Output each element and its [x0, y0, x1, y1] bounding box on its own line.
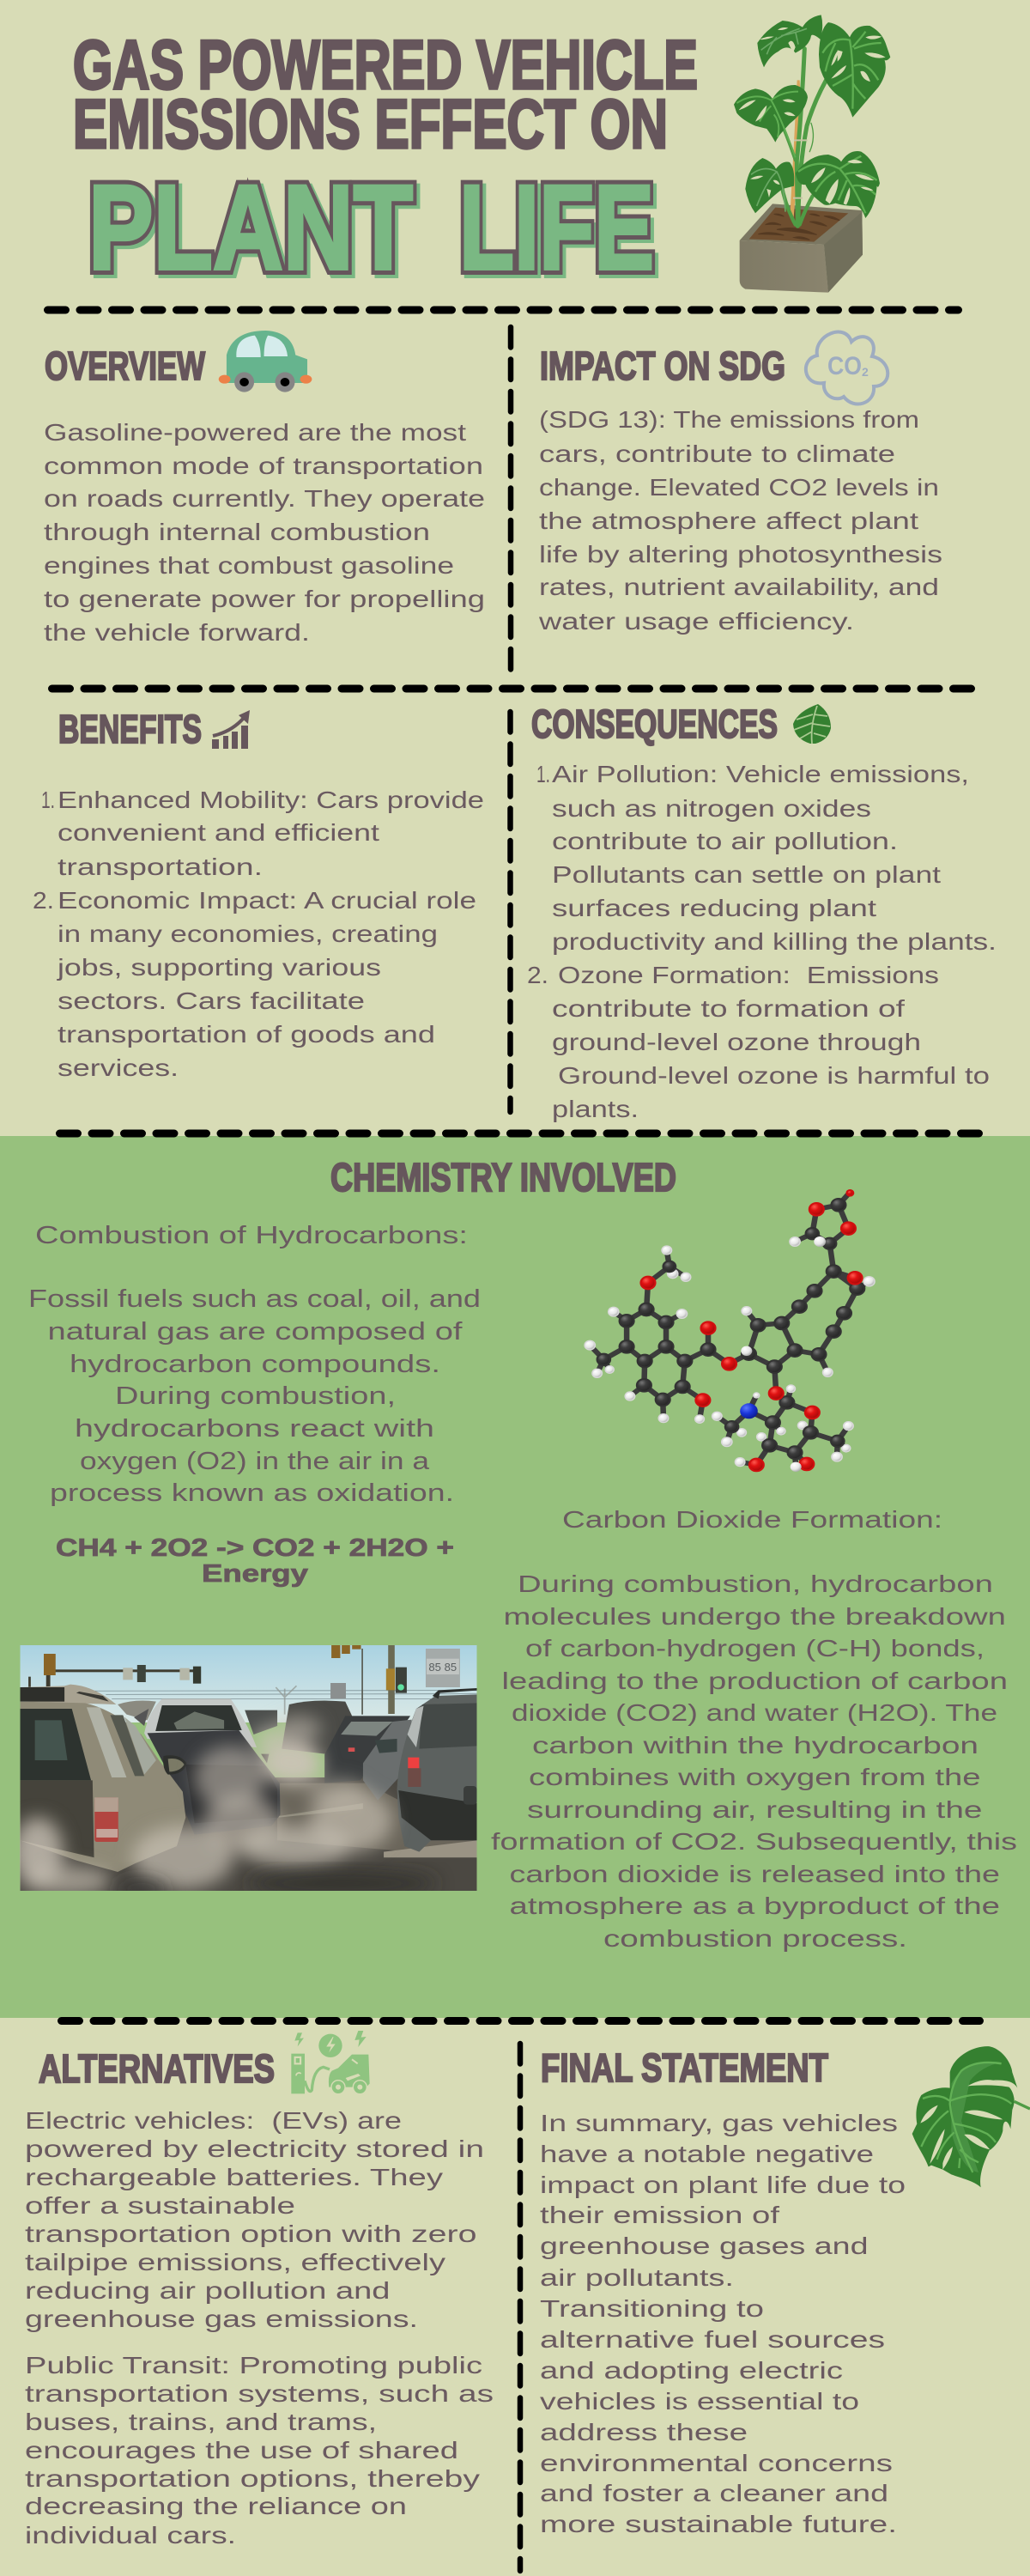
benefits list: services.: [58, 1054, 179, 1081]
text: carbon dioxide formation: leading to the production of carbon: [501, 1668, 1008, 1694]
consequences list: productivity and killing the plants.: [552, 928, 997, 955]
molecule model: [585, 1190, 875, 1472]
impact body text: (SDG 13): The emissions from: [539, 406, 919, 433]
overview body text: through internal combustion: [44, 519, 430, 545]
alternatives body: electric vehicles: tailpipe emissions, effectively: [25, 2249, 445, 2275]
title highlight: plant life: [88, 160, 657, 298]
benefits list: Economic Impact: A crucial role: [58, 887, 476, 914]
impact body text: the atmosphere affect plant: [539, 507, 918, 534]
benefits list: 1.: [41, 787, 55, 813]
text: combustion of hydrocarbons: Combustion of Hydrocarbons:: [35, 1222, 468, 1249]
impact body text: [538, 406, 942, 635]
icon: growth chart with arrow: [212, 710, 250, 749]
plant pot: [740, 204, 863, 293]
benefits list: 2.: [33, 887, 54, 914]
icon: CO2 cloud: CO: [827, 352, 862, 380]
overview body text: common mode of transportation: [44, 453, 483, 479]
benefits list: [33, 787, 484, 1081]
alternatives body: electric vehicles: Electric vehicles: (EVs) are: [25, 2107, 402, 2134]
heading: impact on SDG: IMPACT ON SDG: [540, 343, 785, 388]
text: carbon dioxide formation: Carbon Dioxide Formation:: [562, 1506, 942, 1533]
heading: overview: OVERVIEW: [45, 343, 205, 388]
alternatives body: electric vehicles: transportation option with zero: [25, 2221, 477, 2247]
final statement body text: address these: [540, 2419, 748, 2445]
title highlight: plant life: LIFE: [463, 163, 657, 298]
exhaust smoke: [13, 1716, 437, 1899]
benefits list: transportation.: [58, 854, 263, 880]
panel: overview: [44, 331, 485, 646]
overview body text: Gasoline-powered are the most: [44, 419, 466, 446]
leaf top right: [819, 22, 890, 118]
text: combustion of hydrocarbons: process known as oxidation.: [50, 1479, 454, 1507]
final statement body text: their emission of: [540, 2202, 779, 2228]
impact body text: cars, contribute to climate: [539, 440, 895, 467]
final statement body text: environmental concerns: [540, 2450, 893, 2476]
consequences list: Ozone Formation: Emissions: [558, 962, 939, 988]
alternatives body: electric vehicles: greenhouse gas emissions.: [25, 2306, 418, 2332]
final statement body text: impact on plant life due to: [540, 2172, 906, 2198]
left wagon: [20, 1685, 186, 1872]
text: carbon dioxide formation: atmosphere as a byproduct of the: [510, 1893, 1000, 1919]
text: carbon dioxide formation: During combustion, hydrocarbon: [518, 1571, 993, 1597]
overview body text: to generate power for propelling: [44, 586, 485, 612]
overview body text: engines that combust gasoline: [44, 552, 454, 579]
heading: benefits: BENEFITS: [58, 707, 202, 751]
consequences list: ground-level ozone through: [552, 1029, 921, 1055]
alternatives body: public transit: decreasing the reliance on: [25, 2493, 407, 2519]
impact body text: change. Elevated CO2 levels in: [539, 474, 939, 501]
alternatives body: public transit: Public Transit: Promoting public: [25, 2352, 482, 2379]
text: combustion of hydrocarbons: oxygen (O2) in the air in a: [80, 1448, 430, 1475]
panel: final statement: [540, 2045, 1030, 2537]
text: carbon dioxide formation: molecules undergo the breakdown: [503, 1603, 1006, 1630]
panel: alternatives: [25, 2031, 494, 2549]
text: carbon dioxide formation: of carbon-hydrogen (C-H) bonds,: [525, 1635, 985, 1662]
text: combustion of hydrocarbons: natural gas are composed of: [48, 1318, 464, 1346]
alternatives body: public transit: individual cars.: [25, 2522, 236, 2549]
benefits list: jobs, supporting various: [57, 954, 381, 981]
icon: large monstera leaf: [912, 2046, 1030, 2187]
alternatives body: electric vehicles: rechargeable batteries. They: [25, 2164, 443, 2190]
overview body text: [44, 419, 485, 646]
final statement body text: greenhouse gases and: [540, 2233, 869, 2259]
alternatives body: electric vehicles: [25, 2107, 484, 2332]
text: carbon dioxide formation: formation of CO2. Subsequently, this: [491, 1828, 1017, 1855]
text: combustion of hydrocarbons: [28, 1222, 481, 1507]
equation: Energy: [202, 1560, 308, 1588]
text: carbon dioxide formation: combustion process.: [603, 1925, 907, 1952]
icon: CO2 cloud: 2: [862, 365, 869, 379]
final statement body text: and foster a cleaner and: [540, 2480, 888, 2506]
overview body text: the vehicle forward.: [44, 619, 310, 646]
text: combustion of hydrocarbons: Fossil fuels such as coal, oil, and: [28, 1285, 481, 1313]
final statement body text: air pollutants.: [540, 2264, 734, 2291]
panel: benefits: [33, 707, 484, 1081]
centre suv and sedan: [144, 1698, 281, 1835]
text: combustion of hydrocarbons: hydrocarbon compounds.: [70, 1351, 440, 1378]
consequences list: such as nitrogen oxides: [552, 795, 871, 822]
title highlight: plant life: LIFE: [459, 160, 654, 295]
consequences list: plants.: [552, 1096, 639, 1122]
icon: potted monstera plant: [734, 15, 890, 293]
equation: [56, 1534, 454, 1588]
right suv: [375, 1688, 477, 1852]
alternatives body: public transit: encourages the use of shared: [25, 2437, 458, 2464]
final statement body text: alternative fuel sources: [540, 2326, 885, 2353]
chemistry green band background: [0, 1136, 1030, 2018]
impact body text: life by altering photosynthesis: [539, 541, 942, 568]
equation: CH4 + 2O2 -> CO2 + 2H2O +: [56, 1534, 454, 1562]
panel: consequences: [527, 702, 997, 1122]
alternatives body: public transit: transportation options, thereby: [25, 2465, 480, 2492]
text: carbon dioxide formation: dioxide (CO2) and water (H2O). The: [512, 1699, 997, 1726]
final statement body text: [540, 2110, 906, 2537]
consequences list: surfaces reducing plant: [552, 895, 876, 921]
consequences list: Pollutants can settle on plant: [552, 861, 941, 888]
final statement body text: vehicles is essential to: [540, 2388, 859, 2415]
title highlight: plant life: LIFE: [459, 160, 654, 295]
text: combustion of hydrocarbons: hydrocarbons react with: [75, 1415, 434, 1443]
final statement body text: have a notable negative: [540, 2141, 874, 2167]
panel: impact on SDG: [538, 332, 942, 635]
benefits list: sectors. Cars facilitate: [58, 987, 365, 1014]
consequences list: 2.: [527, 962, 548, 988]
alternatives body: public transit: transportation systems, such as: [25, 2380, 494, 2407]
alternatives body: public transit: buses, trains, and trams,: [25, 2409, 377, 2435]
overview body text: on roads currently. They operate: [44, 485, 485, 512]
title line 1: GAS POWERED VEHICLE: [73, 27, 698, 104]
title highlight: plant life: PLANT: [88, 160, 413, 295]
alternatives body: electric vehicles: offer a sustainable: [25, 2192, 295, 2219]
title line 2: EMISSIONS EFFECT ON: [73, 86, 668, 163]
benefits list: transportation of goods and: [58, 1021, 435, 1048]
consequences list: 1.: [536, 761, 550, 787]
heading: alternatives: ALTERNATIVES: [39, 2046, 275, 2091]
alternatives body: public transit: [25, 2352, 494, 2549]
impact body text: water usage efficiency.: [538, 608, 854, 635]
icon: green car: [219, 331, 312, 392]
title highlight: plant life: PLANT: [88, 160, 413, 295]
consequences list: contribute to formation of: [552, 995, 905, 1022]
final statement body text: Transitioning to: [540, 2295, 764, 2322]
consequences list: Air Pollution: Vehicle emissions,: [552, 761, 969, 787]
consequences list: Ground-level ozone is harmful to: [558, 1062, 990, 1089]
text: carbon dioxide formation: surrounding air, resulting in the: [527, 1796, 982, 1823]
icon: electric car charging: [291, 2031, 370, 2094]
impact body text: rates, nutrient availability, and: [539, 574, 939, 600]
final statement body text: and adopting electric: [540, 2357, 843, 2384]
heading: chemistry involved: CHEMISTRY INVOLVED: [330, 1155, 676, 1200]
benefits list: convenient and efficient: [58, 819, 379, 846]
final statement body text: In summary, gas vehicles: [540, 2110, 898, 2136]
photo: traffic exhaust: [13, 1645, 477, 1899]
text: combustion of hydrocarbons: During combustion,: [115, 1382, 396, 1410]
consequences list: contribute to air pollution.: [552, 828, 898, 854]
alternatives body: electric vehicles: powered by electricity stored in: [25, 2136, 484, 2162]
icon: CO2 cloud: [806, 332, 888, 404]
heading: final statement: FINAL STATEMENT: [541, 2045, 828, 2090]
text: carbon dioxide formation: [491, 1506, 1017, 1952]
final statement body text: more sustainable future.: [540, 2511, 897, 2537]
leaf top left: [757, 15, 822, 67]
icon: monstera leaf: [793, 704, 831, 744]
text: carbon dioxide formation: carbon within the hydrocarbon: [532, 1732, 978, 1759]
heading: consequences: CONSEQUENCES: [531, 702, 778, 746]
leaf bottom right: [796, 151, 880, 218]
leaf bottom left: [745, 158, 794, 213]
photo: traffic exhaust: 85 85: [428, 1661, 457, 1674]
title highlight: plant life: PLANT: [92, 163, 416, 298]
text: carbon dioxide formation: carbon dioxide is released into the: [510, 1861, 1000, 1887]
benefits list: in many economies, creating: [58, 920, 438, 947]
title: [73, 27, 698, 298]
leaf middle left: [734, 85, 808, 143]
panel: chemistry involved: [13, 1155, 1017, 1952]
consequences list: [527, 761, 997, 1122]
benefits list: Enhanced Mobility: Cars provide: [58, 787, 484, 813]
alternatives body: electric vehicles: reducing air pollution and: [25, 2277, 390, 2304]
text: carbon dioxide formation: combines with oxygen from the: [529, 1764, 980, 1790]
plant foliage: [734, 15, 890, 226]
